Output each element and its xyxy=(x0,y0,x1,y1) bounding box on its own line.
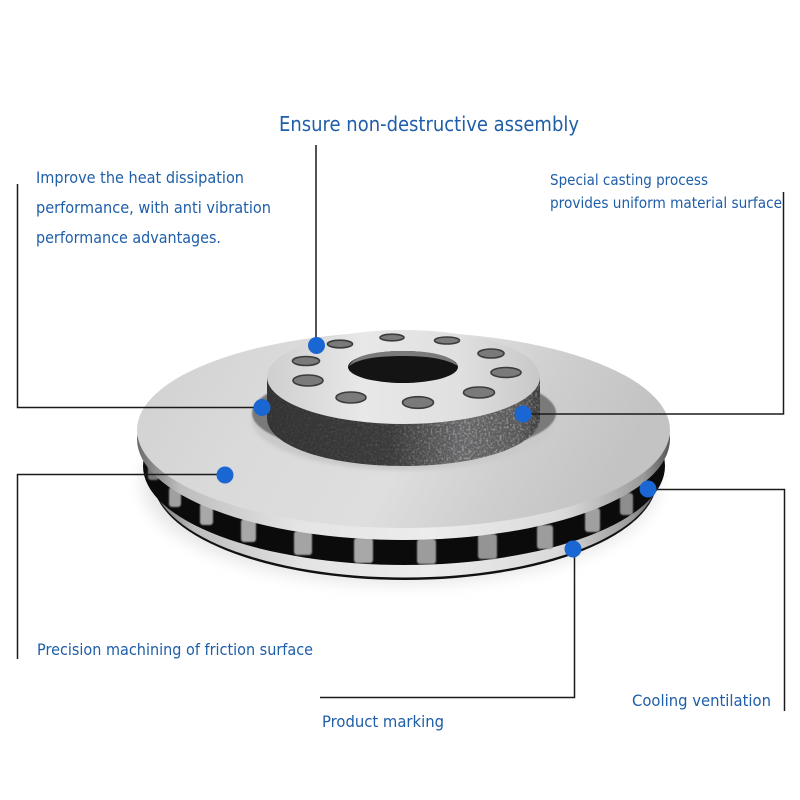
text: cooling ventilation: Cooling ventilation xyxy=(632,691,771,710)
disc shadow xyxy=(142,384,658,584)
hub side wall xyxy=(267,376,540,466)
text: casting process xyxy=(550,171,782,212)
text: heat dissipation: performance advantages. xyxy=(36,228,221,247)
text: heat dissipation xyxy=(36,168,271,247)
cooling vent band xyxy=(143,367,665,565)
centre bore xyxy=(348,351,458,383)
text: heat dissipation: performance, with anti vibration xyxy=(36,198,271,217)
brake disc illustration xyxy=(137,330,670,584)
heading: non-destructive assembly: Ensure non-destructive assembly xyxy=(279,112,579,136)
lower plate xyxy=(153,378,657,580)
text: casting process: Special casting process xyxy=(550,171,708,189)
text: casting process: provides uniform material surface xyxy=(550,194,782,212)
hub recess xyxy=(252,369,556,470)
text: friction surface: Precision machining of friction surface xyxy=(37,640,313,659)
hub top face xyxy=(267,330,540,424)
text: product marking: Product marking xyxy=(322,712,444,731)
callout dots xyxy=(216,337,656,558)
friction surface rim xyxy=(137,338,670,540)
text: heat dissipation: Improve the heat dissipation xyxy=(36,168,244,187)
leader lines xyxy=(18,145,784,711)
bolt holes xyxy=(292,334,521,408)
friction surface xyxy=(137,332,670,528)
